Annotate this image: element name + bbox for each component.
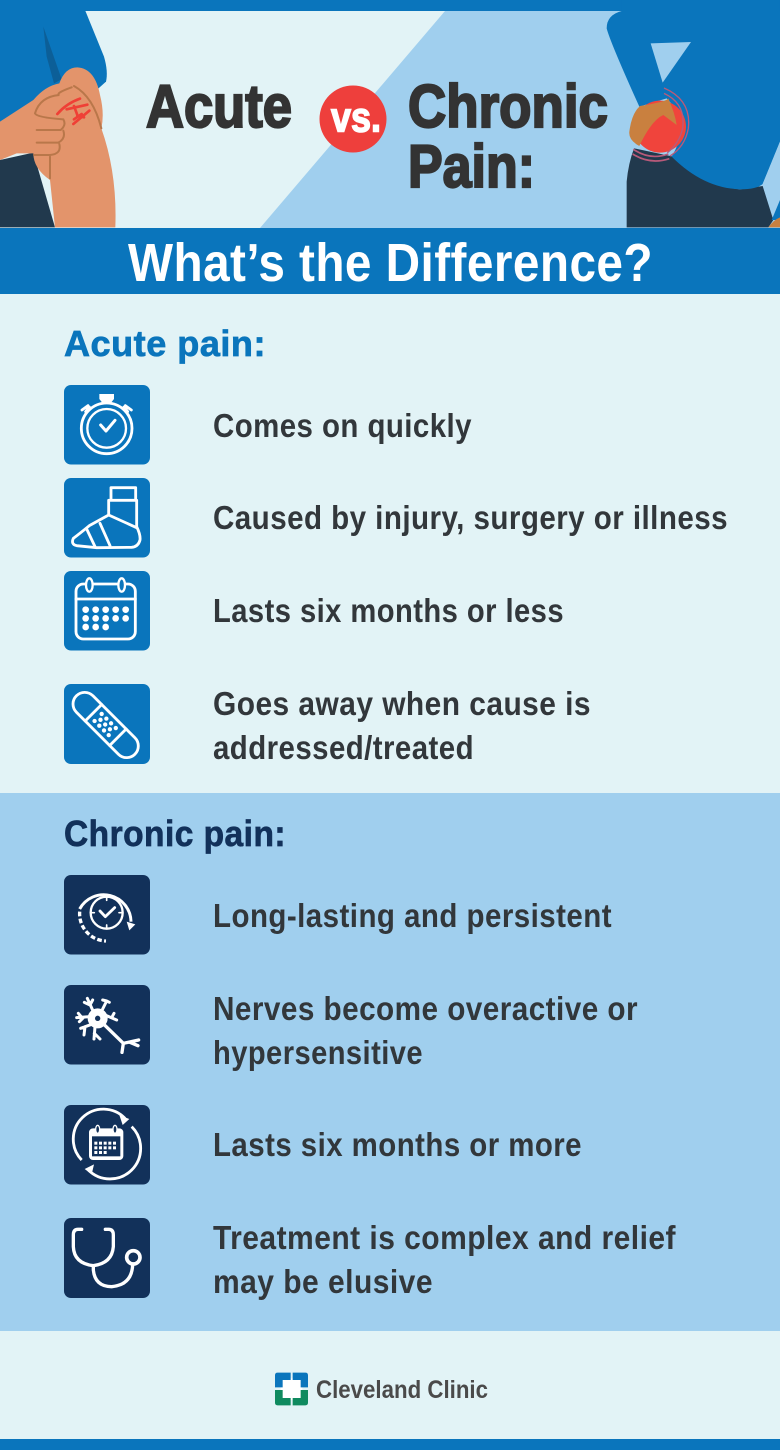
icon: bandaged foot (64, 478, 150, 558)
badge: vs.: vs. (331, 94, 381, 140)
panel: footer (0, 1331, 780, 1439)
panel: acute pain (0, 294, 780, 793)
text: treatment is complex: may be elusive (213, 1263, 433, 1300)
heading: chronic pain: Chronic pain: (64, 813, 286, 854)
icon: stethoscope (64, 1218, 150, 1298)
text: goes away when cause is addressed (213, 685, 591, 766)
subtitle banner (0, 228, 780, 294)
title: Chronic: Chronic (408, 73, 608, 140)
icon: stopwatch (64, 385, 150, 464)
badge: vs. (320, 86, 386, 152)
text: caused by injury: Caused by injury, surgery or illness (213, 499, 728, 536)
subtitle banner: What’s the Difference? (128, 233, 653, 293)
illustration: hand gripping injured knee (0, 10, 116, 227)
text: goes away when cause is addressed: addressed/treated (213, 729, 474, 766)
text: treatment is complex (213, 1219, 676, 1300)
text: nerves become overactive or hypersensitive: Nerves become overactive or (213, 990, 638, 1027)
text: goes away when cause is addressed: Goes away when cause is (213, 685, 591, 722)
text: lasts six months or more: Lasts six months or more (213, 1126, 582, 1163)
text: comes on quickly: Comes on quickly (213, 407, 472, 444)
icon: calendar in a cycle (64, 1105, 150, 1184)
icon: calendar (64, 571, 150, 650)
title: Acute: Acute (146, 73, 292, 140)
logo: Cleveland Clinic: Cleveland Clinic (316, 1376, 488, 1404)
icon: clock with circular arrow (64, 875, 150, 954)
panel: chronic pain (0, 793, 780, 1331)
icon: nerve cell (64, 985, 150, 1064)
logo: Cleveland Clinic (275, 1373, 488, 1405)
title: Pain: Pain: (408, 133, 535, 200)
text: nerves become overactive or hypersensitive (213, 990, 638, 1071)
illustration: person holding painful hip (607, 0, 780, 227)
panel: header banner (0, 0, 780, 228)
text: nerves become overactive or hypersensitive: hypersensitive (213, 1034, 423, 1071)
heading: acute pain: Acute pain: (64, 323, 266, 364)
text: treatment is complex: Treatment is complex and relief (213, 1219, 676, 1256)
bottom bar (0, 1439, 780, 1450)
text: long-lasting and persistent: Long-lasting and persistent (213, 897, 612, 934)
icon: adhesive bandage (64, 684, 150, 764)
text: lasts six months or less: Lasts six months or less (213, 592, 564, 629)
